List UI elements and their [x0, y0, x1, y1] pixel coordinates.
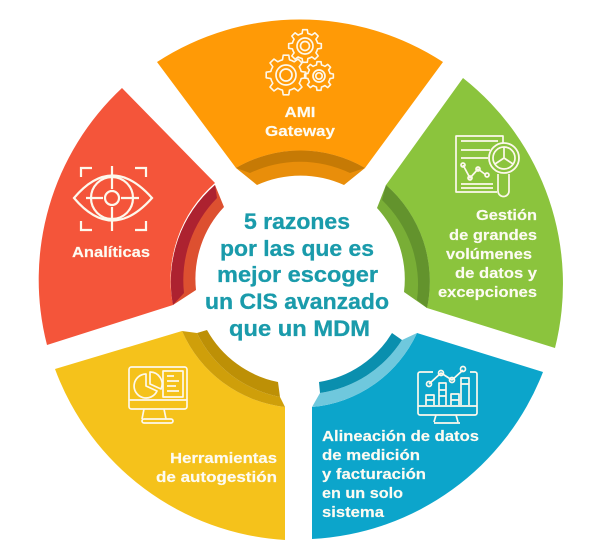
icon: report with magnifier [456, 136, 519, 196]
panel: Gestión de grandes volúmenes [377, 78, 563, 348]
label: Alineación de datos de medición y facturación en un solo sistema: Alineación de datos [322, 429, 479, 445]
label: Herramientas de autogestión: Herramientas [170, 451, 277, 467]
title: mejor escoger [217, 262, 378, 287]
title: un CIS avanzado [205, 289, 389, 314]
icon: monitor with bar chart [418, 366, 477, 423]
label: Gestión de grandes volúmenes de datos y excepciones: excepciones [438, 285, 537, 301]
title: 5 razones [244, 209, 350, 234]
panel: Analíticas [39, 88, 224, 345]
label: Gestión de grandes volúmenes de datos y excepciones: volúmenes [446, 247, 532, 263]
label: Gestión de grandes volúmenes de datos y excepciones [438, 208, 537, 301]
title: por las que es [220, 236, 374, 261]
label: Analíticas: Analíticas [72, 245, 150, 261]
label: Gestión de grandes volúmenes de datos y excepciones: Gestión [476, 208, 537, 224]
panel: Alineación de datos [312, 333, 543, 539]
title [205, 209, 389, 341]
icon: monitor with pie chart [129, 367, 187, 423]
label: Alineación de datos de medición y facturación en un solo sistema: sistema [322, 505, 385, 521]
title: que un MDM [229, 316, 370, 341]
panel: Herramientas de autogestión [55, 330, 285, 540]
label: Herramientas de autogestión [156, 451, 277, 486]
icon: gears [266, 30, 333, 95]
label: Alineación de datos de medición y facturación en un solo sistema: de medición [322, 448, 420, 464]
label: Alineación de datos de medición y facturación en un solo sistema: en un solo [322, 486, 403, 502]
label: AMI Gateway: AMI [284, 105, 316, 121]
label: AMI Gateway: Gateway [265, 124, 335, 140]
label: Gestión de grandes volúmenes de datos y excepciones: de grandes [449, 228, 537, 244]
label: Alineación de datos de medición y facturación en un solo sistema: y facturación [322, 467, 426, 483]
panel: AMI Gateway [157, 20, 443, 185]
label: Alineación de datos de medición y facturación en un solo sistema [322, 429, 479, 521]
label: Gestión de grandes volúmenes de datos y excepciones: de datos y [455, 266, 537, 282]
label: Herramientas de autogestión: de autogestión [156, 470, 277, 486]
label: AMI Gateway [265, 105, 335, 140]
icon: eye target [74, 166, 152, 231]
